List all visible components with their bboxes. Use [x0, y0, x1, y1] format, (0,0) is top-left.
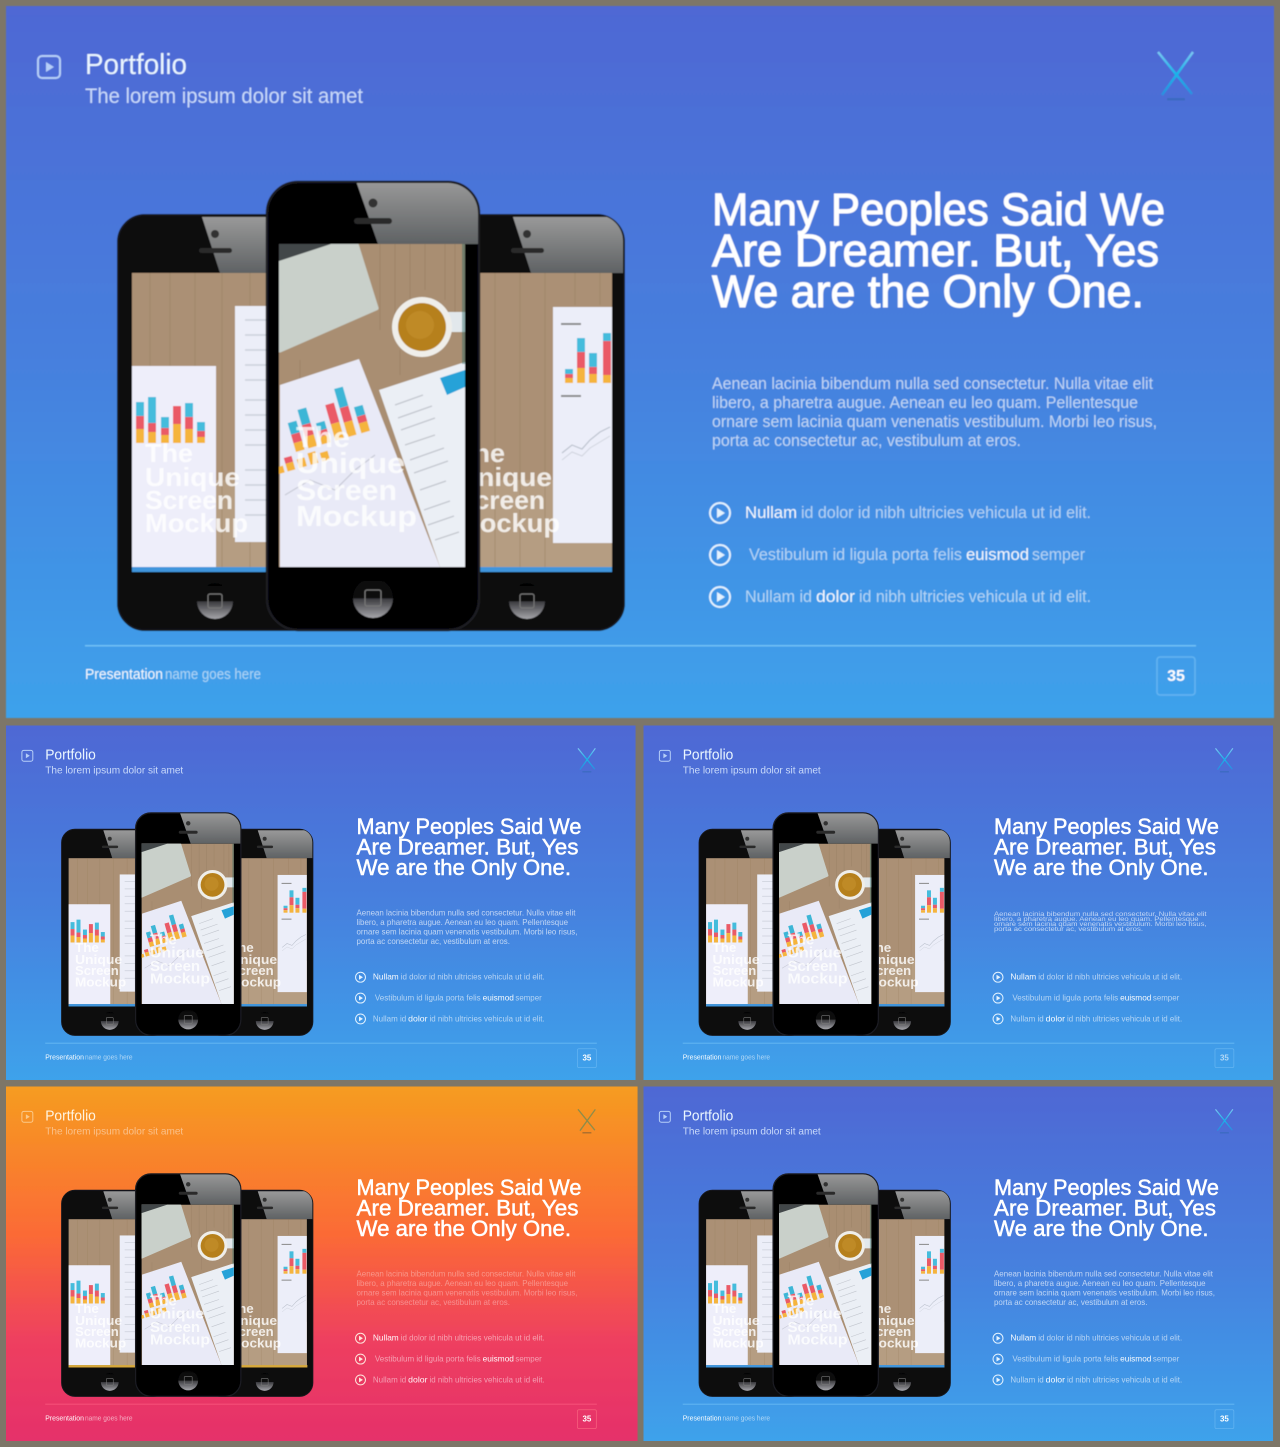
right phone caption: Mockup [230, 1336, 281, 1351]
paragraph [994, 912, 1207, 933]
left phone caption: Screen [75, 963, 119, 978]
left phone caption: Screen [145, 485, 233, 515]
right phone caption: Screen [867, 963, 911, 978]
bullet 3: Nullam id [373, 1374, 406, 1384]
right phone caption: Unique [230, 952, 277, 967]
heading [712, 184, 1165, 317]
center phone caption [296, 422, 417, 533]
bullet 3: dolor [1046, 1374, 1065, 1384]
center phone caption [150, 1293, 210, 1349]
panel: small blue slide left [6, 726, 636, 1080]
center phone caption: Mockup [787, 972, 848, 988]
phone mockup: center [136, 1173, 242, 1396]
subtitle: The lorem ipsum dolor sit amet [45, 1127, 183, 1138]
footer text [45, 1053, 133, 1062]
heading: We are the Only One. [357, 1216, 571, 1241]
page number [1215, 1049, 1234, 1068]
footer text [85, 666, 261, 683]
phone mockup: center [136, 812, 242, 1035]
left phone caption: The [75, 1301, 99, 1316]
paragraph: ornare sem lacinia quam venenatis vestibulum. Morbi leo risus, [357, 1288, 577, 1298]
paragraph: Aenean lacinia bibendum nulla sed consectetur. Nulla vitae elit [357, 1269, 576, 1279]
center phone caption: Screen [296, 475, 397, 507]
bullet 2: euismod [1120, 1354, 1152, 1364]
bullet 2 [710, 545, 1085, 565]
paragraph: Aenean lacinia bibendum nulla sed consectetur. Nulla vitae elit [994, 1269, 1214, 1279]
paragraph: ornare sem lacinia quam venenatis vestibulum. Morbi leo risus, [357, 927, 577, 937]
bullet 3 [710, 587, 1091, 607]
center phone caption: Unique [787, 945, 842, 961]
left phone caption: Unique [713, 952, 760, 967]
panel: main blue slide [6, 6, 1274, 718]
left phone caption [713, 1301, 764, 1351]
subtitle: The lorem ipsum dolor sit amet [45, 766, 183, 777]
icon: X logo [578, 1109, 595, 1133]
page number [1215, 1410, 1234, 1429]
footer text [683, 1053, 770, 1062]
bullet 3: dolor [408, 1013, 428, 1023]
bullet 2: Vestibulum id ligula porta felis [1012, 1354, 1118, 1364]
center phone caption [787, 932, 848, 988]
icon: play box [22, 1111, 33, 1122]
heading: Many Peoples Said We [994, 1175, 1219, 1200]
bullet 2: semper [515, 1354, 542, 1364]
paragraph: Aenean lacinia bibendum nulla sed consectetur. Nulla vitae elit [712, 374, 1153, 393]
page number: 35 [1220, 1415, 1229, 1424]
phone mockups: back pair [699, 1190, 951, 1396]
left phone caption: Unique [145, 462, 240, 492]
page number [577, 1049, 596, 1068]
footer text: name goes here [85, 1414, 133, 1423]
center phone caption: Screen [150, 959, 200, 975]
center phone caption [787, 1293, 848, 1349]
left phone caption: The [713, 940, 736, 955]
title: Portfolio [45, 747, 96, 763]
bullet 3 [993, 1013, 1182, 1024]
left phone caption: Unique [75, 952, 122, 967]
footer text: name goes here [722, 1414, 770, 1423]
right phone caption: Unique [867, 1313, 915, 1328]
page number [577, 1410, 596, 1429]
page number [1157, 657, 1195, 695]
panel: small orange slide [6, 1086, 638, 1441]
right phone caption [867, 1301, 919, 1351]
footer text: Presentation [683, 1414, 721, 1423]
heading: Many Peoples Said We [357, 1175, 581, 1200]
icon: X logo [578, 748, 595, 772]
footer text [683, 1414, 770, 1423]
heading [994, 814, 1219, 880]
bullet 2: semper [1032, 545, 1085, 564]
subtitle: The lorem ipsum dolor sit amet [683, 1127, 821, 1138]
paragraph: libero, a pharetra augue. Aenean eu leo quam. Pellentesque [357, 1278, 568, 1288]
phone mockup: center [267, 181, 482, 630]
phone mockup: center [773, 812, 880, 1035]
center phone caption: Unique [787, 1306, 842, 1322]
bullet 3: dolor [408, 1374, 428, 1384]
left phone caption: Screen [75, 1324, 119, 1339]
right phone caption: Mockup [867, 1336, 919, 1351]
paragraph: libero, a pharetra augue. Aenean eu leo quam. Pellentesque [994, 917, 1199, 923]
bullet 3: Nullam id [1010, 1013, 1044, 1023]
bullet 2: euismod [483, 993, 514, 1003]
paragraph [712, 374, 1157, 450]
center phone caption: The [787, 1293, 814, 1309]
heading [357, 814, 581, 880]
bullet 1 [710, 503, 1091, 523]
left phone caption: The [75, 940, 99, 955]
bullet 3: Nullam id [1010, 1374, 1044, 1384]
page number: 35 [582, 1054, 592, 1063]
phone mockups: back pair [62, 829, 314, 1035]
title: Portfolio [45, 1108, 96, 1124]
center phone caption: Unique [150, 1306, 204, 1322]
icon: X logo [1158, 52, 1193, 100]
bullet 2: euismod [1120, 993, 1152, 1003]
page number: 35 [1167, 668, 1185, 685]
heading: Are Dreamer. But, Yes [357, 835, 578, 860]
center phone caption: Mockup [150, 972, 210, 988]
bullet 3: dolor [816, 587, 855, 606]
heading: We are the Only One. [712, 266, 1144, 317]
right phone caption: The [230, 940, 254, 955]
center phone caption: The [296, 422, 350, 454]
heading: Are Dreamer. But, Yes [994, 835, 1216, 860]
paragraph: ornare sem lacinia quam venenatis vestibulum. Morbi leo risus, [994, 1288, 1215, 1298]
footer text: Presentation [85, 666, 163, 683]
right phone caption: Mockup [457, 508, 560, 538]
left phone caption: Unique [75, 1313, 122, 1328]
subtitle: The lorem ipsum dolor sit amet [683, 766, 821, 777]
center phone caption: The [150, 932, 177, 948]
paragraph: libero, a pharetra augue. Aenean eu leo quam. Pellentesque [712, 393, 1138, 412]
right phone caption: Unique [867, 952, 915, 967]
subtitle: The lorem ipsum dolor sit amet [85, 85, 363, 108]
right phone caption: The [457, 438, 505, 468]
center phone caption: Screen [787, 959, 838, 975]
panel: small blue slide right [644, 726, 1273, 1080]
center phone caption: Unique [150, 945, 204, 961]
bullet 3: id nibh ultricies vehicula ut id elit. [1067, 1374, 1182, 1384]
footer text: name goes here [85, 1053, 133, 1062]
right phone caption [230, 940, 281, 990]
icon: play box [659, 1111, 670, 1122]
heading: We are the Only One. [357, 855, 571, 880]
phone mockups: back pair [62, 1190, 314, 1396]
left phone caption [75, 940, 126, 990]
center phone caption: Mockup [150, 1333, 210, 1349]
bullet 1 [356, 1333, 545, 1343]
right phone caption: The [867, 940, 891, 955]
paragraph: libero, a pharetra augue. Aenean eu leo quam. Pellentesque [994, 1278, 1206, 1288]
right phone caption [230, 1301, 281, 1351]
center phone caption: The [150, 1293, 177, 1309]
footer text: name goes here [165, 666, 261, 683]
left phone caption: Mockup [75, 975, 126, 990]
paragraph [357, 1269, 577, 1307]
bullet 2: Vestibulum id ligula porta felis [375, 1354, 481, 1364]
bullet 3: id nibh ultricies vehicula ut id elit. [430, 1374, 545, 1384]
bullet 2 [356, 993, 542, 1003]
bullet 2: euismod [483, 1354, 514, 1364]
phone mockups: back pair [118, 215, 626, 630]
left phone caption: Mockup [145, 508, 248, 538]
bullet 1: id dolor id nibh ultricies vehicula ut id elit. [801, 503, 1091, 522]
center phone caption: Screen [150, 1320, 200, 1336]
right phone caption [867, 940, 919, 990]
left phone caption: Screen [713, 963, 756, 978]
center phone caption: The [787, 932, 814, 948]
bullet 3: Nullam id [745, 587, 812, 606]
heading [357, 1175, 581, 1241]
icon: play box [38, 56, 60, 78]
bullet 2: semper [1153, 993, 1179, 1003]
paragraph: libero, a pharetra augue. Aenean eu leo quam. Pellentesque [357, 917, 568, 927]
phone mockup: center [773, 1173, 880, 1396]
phone mockups: back pair [699, 829, 951, 1035]
screen strips: yellow tint [69, 1365, 307, 1368]
heading: Are Dreamer. But, Yes [994, 1196, 1216, 1221]
footer text: Presentation [45, 1414, 84, 1423]
bullet 2: Vestibulum id ligula porta felis [1012, 993, 1118, 1003]
paragraph [994, 1269, 1215, 1307]
paragraph: porta ac consectetur ac, vestibulum at eros. [994, 927, 1143, 933]
center phone caption [150, 932, 210, 988]
paragraph: porta ac consectetur ac, vestibulum at eros. [357, 1297, 510, 1307]
heading: Many Peoples Said We [357, 814, 581, 839]
bullet 2: Vestibulum id ligula porta felis [375, 993, 481, 1003]
bullet 2: euismod [966, 545, 1029, 564]
footer text: name goes here [722, 1053, 770, 1062]
left phone caption [713, 940, 764, 990]
left phone caption: The [713, 1301, 736, 1316]
left phone caption: Mockup [713, 1336, 764, 1351]
bullet 1: Nullam [373, 1333, 399, 1343]
icon: X logo [1215, 748, 1233, 772]
center phone caption: Screen [787, 1320, 838, 1336]
bullet 1: Nullam [373, 972, 399, 982]
bullet 3: id nibh ultricies vehicula ut id elit. [859, 587, 1091, 606]
bullet 3: Nullam id [373, 1013, 406, 1023]
footer text [45, 1414, 133, 1423]
footer text: Presentation [683, 1053, 721, 1062]
bullet 1: Nullam [1010, 972, 1036, 982]
right phone caption: Screen [867, 1324, 911, 1339]
center phone caption: Unique [296, 448, 405, 480]
right phone caption: Screen [230, 1324, 274, 1339]
paragraph: ornare sem lacinia quam venenatis vestibulum. Morbi leo risus, [994, 922, 1207, 928]
right phone caption: Unique [230, 1313, 277, 1328]
bullet 3: id nibh ultricies vehicula ut id elit. [430, 1013, 545, 1023]
heading: Many Peoples Said We [994, 814, 1219, 839]
heading: Many Peoples Said We [712, 184, 1165, 235]
bullet 2: Vestibulum id ligula porta felis [749, 545, 962, 564]
right phone caption: Mockup [230, 975, 281, 990]
center phone caption: Mockup [787, 1333, 848, 1349]
right phone caption: The [867, 1301, 891, 1316]
left phone caption [145, 438, 248, 538]
bullet 3 [356, 1374, 545, 1385]
left phone caption: Mockup [75, 1336, 126, 1351]
title: Portfolio [85, 49, 187, 81]
bullet 1 [993, 972, 1182, 982]
bullet 1: Nullam [745, 503, 797, 522]
page number: 35 [582, 1415, 592, 1424]
bullet 3 [993, 1374, 1182, 1385]
paragraph: porta ac consectetur ac, vestibulum at eros. [712, 431, 1021, 450]
bullet 1: id dolor id nibh ultricies vehicula ut id elit. [401, 972, 545, 982]
paragraph: porta ac consectetur ac, vestibulum at eros. [357, 936, 510, 946]
right phone caption [457, 438, 560, 538]
left phone caption: Mockup [713, 975, 764, 990]
title: Portfolio [683, 1108, 733, 1124]
bullet 2 [993, 1354, 1179, 1364]
icon: X logo [1215, 1109, 1233, 1133]
heading: We are the Only One. [994, 855, 1209, 880]
heading: Are Dreamer. But, Yes [357, 1196, 578, 1221]
left phone caption: Screen [713, 1324, 756, 1339]
bullet 2: semper [1153, 1354, 1179, 1364]
bullet 3: dolor [1046, 1013, 1065, 1023]
bullet 1: Nullam [1010, 1333, 1036, 1343]
right phone caption: Screen [230, 963, 274, 978]
bullet 2 [356, 1354, 542, 1364]
paragraph: Aenean lacinia bibendum nulla sed consectetur. Nulla vitae elit [357, 908, 576, 918]
bullet 1: id dolor id nibh ultricies vehicula ut id elit. [1038, 972, 1182, 982]
paragraph: porta ac consectetur ac, vestibulum at eros. [994, 1297, 1147, 1307]
bullet 3 [356, 1013, 545, 1024]
bullet 2 [993, 993, 1179, 1003]
right phone caption: Screen [457, 485, 545, 515]
bullet 2: semper [515, 993, 542, 1003]
icon: play box [22, 750, 33, 761]
heading [994, 1175, 1219, 1241]
right phone caption: Mockup [867, 975, 919, 990]
paragraph: Aenean lacinia bibendum nulla sed consectetur. Nulla vitae elit [994, 912, 1207, 918]
panel: small blue slide bottom right [644, 1086, 1273, 1441]
title: Portfolio [683, 747, 733, 763]
heading: We are the Only One. [994, 1216, 1209, 1241]
paragraph: ornare sem lacinia quam venenatis vestibulum. Morbi leo risus, [712, 412, 1157, 431]
center phone caption: Mockup [296, 501, 417, 533]
left phone caption: The [145, 438, 193, 468]
right phone caption: Unique [457, 462, 552, 492]
left phone caption: Unique [713, 1313, 760, 1328]
bullet 3: id nibh ultricies vehicula ut id elit. [1067, 1013, 1182, 1023]
page number: 35 [1220, 1054, 1229, 1063]
bullet 1: id dolor id nibh ultricies vehicula ut id elit. [401, 1333, 545, 1343]
bullet 1: id dolor id nibh ultricies vehicula ut id elit. [1038, 1333, 1182, 1343]
icon: play box [659, 750, 670, 761]
right phone caption: The [230, 1301, 254, 1316]
heading: Are Dreamer. But, Yes [712, 225, 1159, 276]
footer text: Presentation [45, 1053, 84, 1062]
paragraph [357, 908, 577, 946]
bullet 1 [356, 972, 545, 982]
bullet 1 [993, 1333, 1182, 1343]
left phone caption [75, 1301, 126, 1351]
